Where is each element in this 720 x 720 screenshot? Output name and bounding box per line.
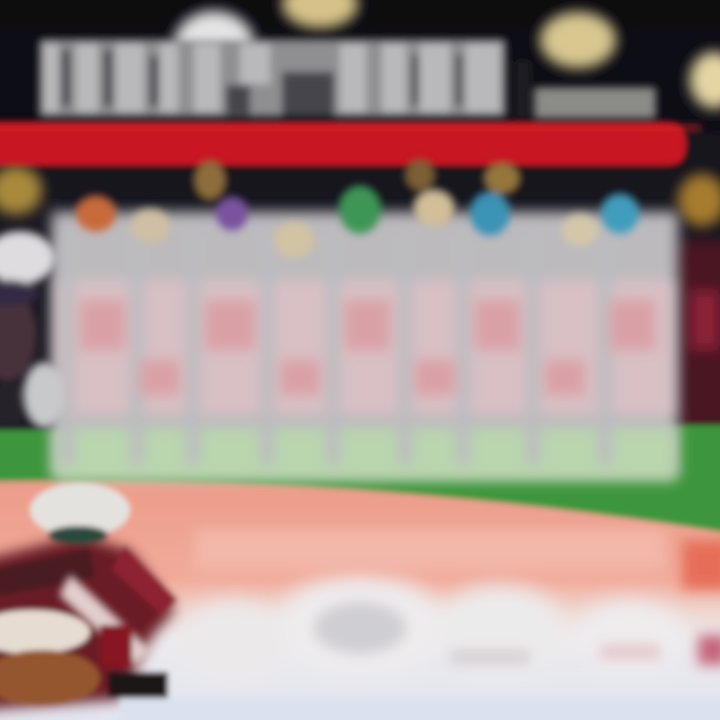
stadium background [0,0,720,535]
red rows [80,300,655,395]
table panel [52,212,678,480]
bottom strip [120,698,720,720]
red banner [0,123,686,165]
column header icons [76,159,639,258]
player upper left [0,232,64,427]
right edge accent [682,540,720,665]
floor panel [0,481,720,720]
stadium lights [0,0,720,226]
title [40,40,655,118]
baseball player lower left [0,483,178,710]
lower text cards [180,575,685,680]
body band [58,280,673,415]
column dividers [60,235,612,465]
lower card text blocks [195,530,665,664]
green lower band [54,428,676,480]
